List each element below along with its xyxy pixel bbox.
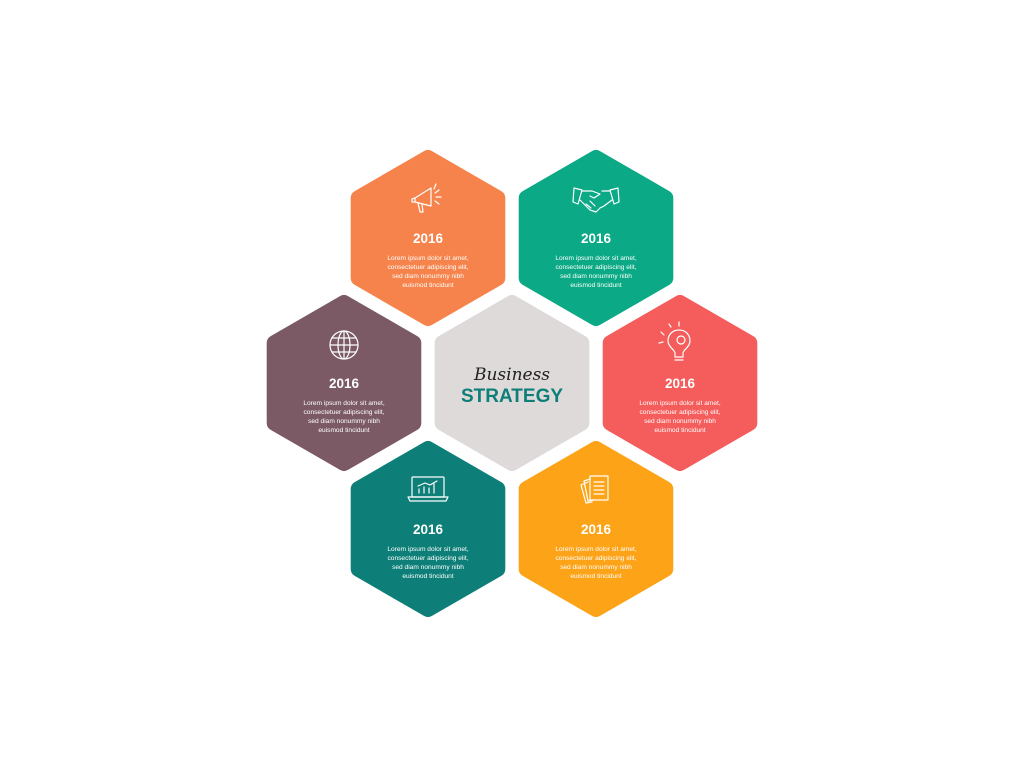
hexagon: bottom-left dark teal: sed diam nonummy nibh <box>392 564 464 571</box>
hexagon: bottom-left dark teal: euismod tincidunt <box>402 573 454 580</box>
hexagon: left plum <box>275 303 413 463</box>
icon: globe <box>330 331 358 359</box>
hexagon: bottom-right amber: sed diam nonummy nibh <box>560 564 632 571</box>
hexagon: bottom-right amber <box>527 449 665 609</box>
hexagon: left plum: consectetuer adipiscing elit, <box>303 409 385 416</box>
icon: documents <box>581 476 608 503</box>
hexagon: bottom-right amber: euismod tincidunt <box>570 573 622 580</box>
hexagon: top-right green: 2016 <box>581 231 612 246</box>
hexagon: top-right green <box>527 158 665 318</box>
hexagon: bottom-left dark teal: Lorem ipsum dolor sit amet, <box>387 546 469 553</box>
icon: megaphone <box>412 184 441 212</box>
hexagon: center strategy <box>443 303 581 463</box>
hexagon: top-left orange: Lorem ipsum dolor sit amet, <box>387 255 469 262</box>
hexagon: top-left orange <box>359 158 497 318</box>
hexagon: top-right green: consectetuer adipiscing elit, <box>555 264 637 271</box>
hexagon: bottom-right amber: 2016 <box>581 522 612 537</box>
hexagon: right coral: Lorem ipsum dolor sit amet, <box>639 400 721 407</box>
hexagon: top-right green: sed diam nonummy nibh <box>560 273 632 280</box>
hexagon: top-left orange: 2016 <box>413 231 444 246</box>
hexagon: bottom-left dark teal <box>359 449 497 609</box>
hexagon: left plum: euismod tincidunt <box>318 427 370 434</box>
hexagon: right coral: sed diam nonummy nibh <box>644 418 716 425</box>
icon: handshake <box>573 188 619 212</box>
hexagon: right coral: consectetuer adipiscing elit, <box>639 409 721 416</box>
hexagon: top-left orange: consectetuer adipiscing elit, <box>387 264 469 271</box>
hexagon: bottom-right amber: Lorem ipsum dolor sit amet, <box>555 546 637 553</box>
hexagon: top-right green: euismod tincidunt <box>570 282 622 289</box>
hexagon: top-left orange: euismod tincidunt <box>402 282 454 289</box>
hexagon: left plum: 2016 <box>329 376 360 391</box>
hexagon: right coral: euismod tincidunt <box>654 427 706 434</box>
icon: laptop chart <box>408 477 448 501</box>
hexagon: left plum: Lorem ipsum dolor sit amet, <box>303 400 385 407</box>
icon: lightbulb gear <box>659 322 690 360</box>
hexagon: bottom-right amber: consectetuer adipiscing elit, <box>555 555 637 562</box>
hexagon: top-right green: Lorem ipsum dolor sit amet, <box>555 255 637 262</box>
hexagon: right coral <box>611 303 749 463</box>
hexagon: bottom-left dark teal: consectetuer adipiscing elit, <box>387 555 469 562</box>
hexagon: right coral: 2016 <box>665 376 696 391</box>
hexagon: top-left orange: sed diam nonummy nibh <box>392 273 464 280</box>
hexagon: left plum: sed diam nonummy nibh <box>308 418 380 425</box>
title: STRATEGY: STRATEGY <box>461 386 563 407</box>
title: Business: Business <box>473 365 550 385</box>
hexagon: bottom-left dark teal: 2016 <box>413 522 444 537</box>
